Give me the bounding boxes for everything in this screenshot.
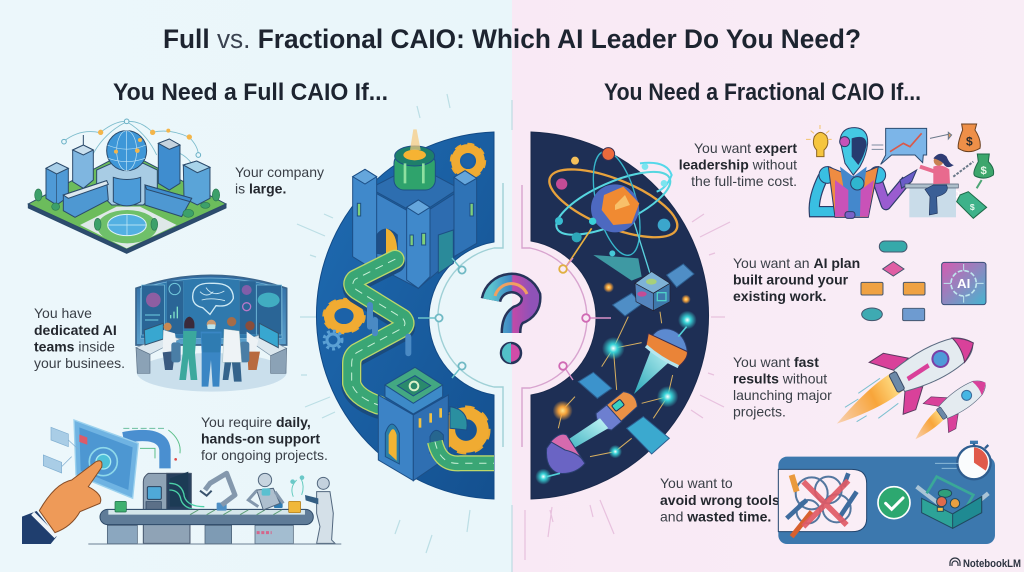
illustration: hand, dashboard and production line [22,420,341,544]
icon: question mark [491,283,531,363]
text: dedicated AI teams: You have [34,305,92,321]
illustration: AI advisor and budget: $ [970,202,975,212]
text: fast results: launching major [733,387,832,403]
text: expert leadership: without [749,156,797,172]
title: Full vs. Fractional CAIO: Which AI Leader Do You Need? [163,24,861,54]
text: expert leadership: leadership [679,156,749,172]
panel: right background [512,0,1024,572]
icon: connected nodes [535,282,697,485]
text: avoid wrong tools: avoid wrong tools [660,492,780,508]
text: fast results: without [779,370,827,386]
illustration: AI advisor and budget: $ [966,135,973,149]
icon: atom [541,147,686,273]
standing team [179,317,242,387]
text: avoid wrong tools: wasted time. [686,508,771,524]
icon: spacecraft with beams [546,327,687,477]
illustration: AI operations team [136,275,287,392]
icon: bottom tower [378,367,467,481]
text: company is large: Your company [235,164,324,180]
text: avoid wrong tools: You want to [660,475,733,491]
icon: lower road [435,442,494,463]
text: AI plan: You want an AI plan [733,255,860,271]
illustration: AI advisor and budget [806,124,994,218]
desks [136,323,287,373]
heading: fractional CAIO: You Need a Fractional CAIO If... [604,79,921,106]
text: fast results: projects. [733,404,786,420]
icon: toolbox [917,477,988,528]
text: company is large: is [235,180,249,196]
illustration: flowchart and AI chip [861,241,986,321]
text: dedicated AI teams: your businees. [34,355,125,371]
text: avoid wrong tools: and [660,508,687,524]
illustration: AI advisor and budget: $ [980,165,987,177]
panel: left background [0,0,512,572]
central circle decoration [418,183,611,447]
text: AI plan: existing work. [733,288,826,304]
heading: full CAIO: You Need a Full CAIO If... [113,79,388,106]
panel: central navy arc [531,132,709,499]
text: expert leadership: the full-time cost. [691,173,797,189]
text: expert leadership: You want expert [694,140,797,156]
text: daily hands-on support: for ongoing projects. [201,447,328,463]
text: dedicated AI teams: dedicated AI [34,322,117,338]
text: AI plan: built around your [733,272,849,288]
icon: AI chip: AI [957,276,970,291]
text: fast results: results [733,370,779,386]
panel: central blue arc [316,129,494,499]
icon: check mark [878,487,910,519]
icon: winding road [352,259,408,408]
icon: satellite [593,255,694,316]
illustration: isometric campus [28,119,226,253]
icon: top tower [353,129,477,288]
icon: stopwatch [957,441,991,479]
icon: tangled tools [787,473,857,537]
icon: pointing hand [22,461,102,544]
text: daily hands-on support: hands-on support [201,430,320,446]
text: daily hands-on support: You require daily, [201,414,311,430]
panel: tools comparison [778,441,995,544]
text: dedicated AI teams: inside [74,338,115,354]
icon: orange gears [324,147,485,449]
text: dedicated AI teams: teams [34,338,75,354]
seated operators [163,321,260,370]
illustration: rockets [818,315,997,451]
text: company is large: large. [249,180,286,196]
text: fast results: You want fast [733,354,819,370]
